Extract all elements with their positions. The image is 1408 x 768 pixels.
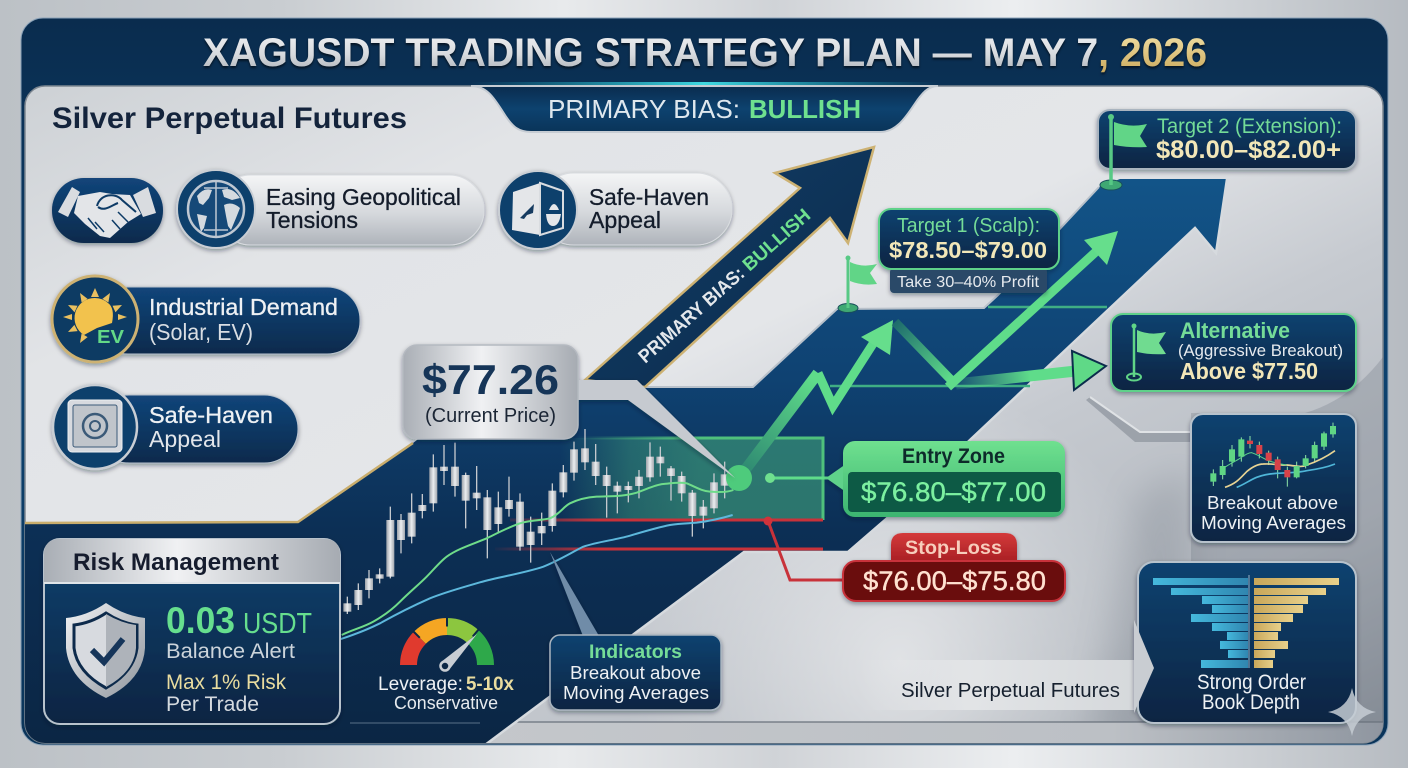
callout: target 1: Target 1 (Scalp): <box>897 215 1040 237</box>
risk management panel: Max 1% Risk <box>166 671 286 694</box>
silver perpetual futures ribbon <box>860 660 1135 710</box>
stop-loss label: Stop-Loss <box>905 538 1002 559</box>
entry zone rectangle <box>560 438 823 520</box>
pill: handshake <box>52 178 163 243</box>
primary bias arrow <box>585 147 874 387</box>
pill: safe-haven appeal (lower): Appeal <box>149 426 221 452</box>
silver connector to breakout card <box>1086 397 1192 442</box>
callout: target 2 <box>1098 110 1356 190</box>
entry zone label <box>826 441 1065 517</box>
indicators callout: Indicators <box>589 642 682 663</box>
risk management panel <box>44 539 340 724</box>
card: order book depth: Book Depth <box>1202 691 1300 714</box>
entry zone label: $76.80–$77.00 <box>861 477 1046 507</box>
primary bias tab: PRIMARY BIAS: <box>548 94 740 124</box>
current price callout: (Current Price) <box>425 405 556 427</box>
stop-loss label: $76.00–$75.80 <box>863 566 1046 596</box>
risk management panel: Balance Alert <box>166 640 295 663</box>
green trade path arrows <box>739 231 1118 478</box>
icon: sun and EV <box>52 276 138 362</box>
icon: handshake <box>58 187 156 238</box>
mini candlestick chart <box>1210 423 1336 487</box>
title: XAGUSDT TRADING STRATEGY PLAN — MAY 7, 2026 <box>203 31 1207 75</box>
indicators callout <box>550 552 721 710</box>
candlestick chart <box>340 429 733 639</box>
leverage gauge: 5-10x <box>466 674 514 695</box>
callout: alternative breakout: Above $77.50 <box>1180 358 1318 384</box>
card: order book depth <box>1134 562 1356 723</box>
depth bars <box>1153 575 1339 668</box>
risk management panel: Risk Management <box>73 549 279 576</box>
current price callout <box>403 345 735 478</box>
stop-loss lines <box>495 520 823 549</box>
stop-loss label <box>843 533 1065 601</box>
pill: safe-haven appeal (lower): Safe-Haven <box>149 402 273 428</box>
leverage gauge: Conservative <box>394 693 498 713</box>
icon: vault box <box>499 171 577 249</box>
indicators callout: Breakout above <box>570 663 701 683</box>
pill: easing geopolitical tensions: Easing Geopolitical <box>266 184 461 210</box>
card: order book depth: Strong Order <box>1197 671 1306 694</box>
entry zone label: Entry Zone <box>902 445 1005 468</box>
icon: globe <box>177 170 255 248</box>
entry dot and connector <box>726 465 845 491</box>
card: breakout above moving averages <box>1191 414 1356 542</box>
callout: alternative breakout: Alternative <box>1180 318 1290 343</box>
callout: target 2: $80.00–$82.00+ <box>1156 136 1341 164</box>
icon: shield <box>66 603 145 698</box>
pill: easing geopolitical tensions <box>177 170 484 248</box>
risk management panel: 0.03 <box>166 600 235 641</box>
sparkle mark <box>1328 688 1376 736</box>
callout: alternative breakout: (Aggressive Breakout) <box>1178 341 1343 360</box>
current price callout: $77.26 <box>422 356 559 403</box>
primary bias tab: BULLISH <box>749 94 861 124</box>
pill: industrial demand <box>52 276 360 362</box>
primary bias arrow: PRIMARY BIAS: <box>635 263 749 368</box>
pill: safe-haven appeal (top): Safe-Haven <box>589 184 709 210</box>
silver perpetual futures ribbon: Silver Perpetual Futures <box>901 680 1120 702</box>
icon: sun and EV: EV <box>97 327 124 347</box>
stop-loss connector <box>764 516 846 580</box>
card: breakout above moving averages: Breakout above <box>1207 493 1338 513</box>
pill: safe-haven appeal (top): Appeal <box>589 207 661 233</box>
callout: target 1 <box>879 209 1059 293</box>
icon: safe <box>53 385 137 469</box>
callout: target 1: Take 30–40% Profit <box>897 274 1040 291</box>
pill: safe-haven appeal (top) <box>499 171 732 249</box>
navy rising band <box>24 179 1227 745</box>
primary bias tab <box>470 82 938 132</box>
leverage gauge <box>378 618 514 713</box>
panel heading: Silver Perpetual Futures <box>52 102 407 135</box>
indicators callout: Moving Averages <box>563 683 709 703</box>
pill: industrial demand: (Solar, EV) <box>149 319 253 345</box>
risk management panel: USDT <box>243 608 312 640</box>
pill: easing geopolitical tensions: Tensions <box>266 207 358 233</box>
risk management panel: Per Trade <box>166 693 259 716</box>
primary bias arrow: BULLISH <box>739 205 815 276</box>
callout: target 2: Target 2 (Extension): <box>1157 115 1342 138</box>
pill: industrial demand: Industrial Demand <box>149 294 338 320</box>
card: breakout above moving averages: Moving Averages <box>1201 513 1346 533</box>
callout: alternative breakout <box>1111 314 1356 391</box>
flag: target 1 <box>838 256 877 312</box>
pill: safe-haven appeal (lower) <box>53 385 298 469</box>
leverage gauge: Leverage: <box>378 674 463 695</box>
callout: target 1: $78.50–$79.00 <box>889 237 1047 263</box>
